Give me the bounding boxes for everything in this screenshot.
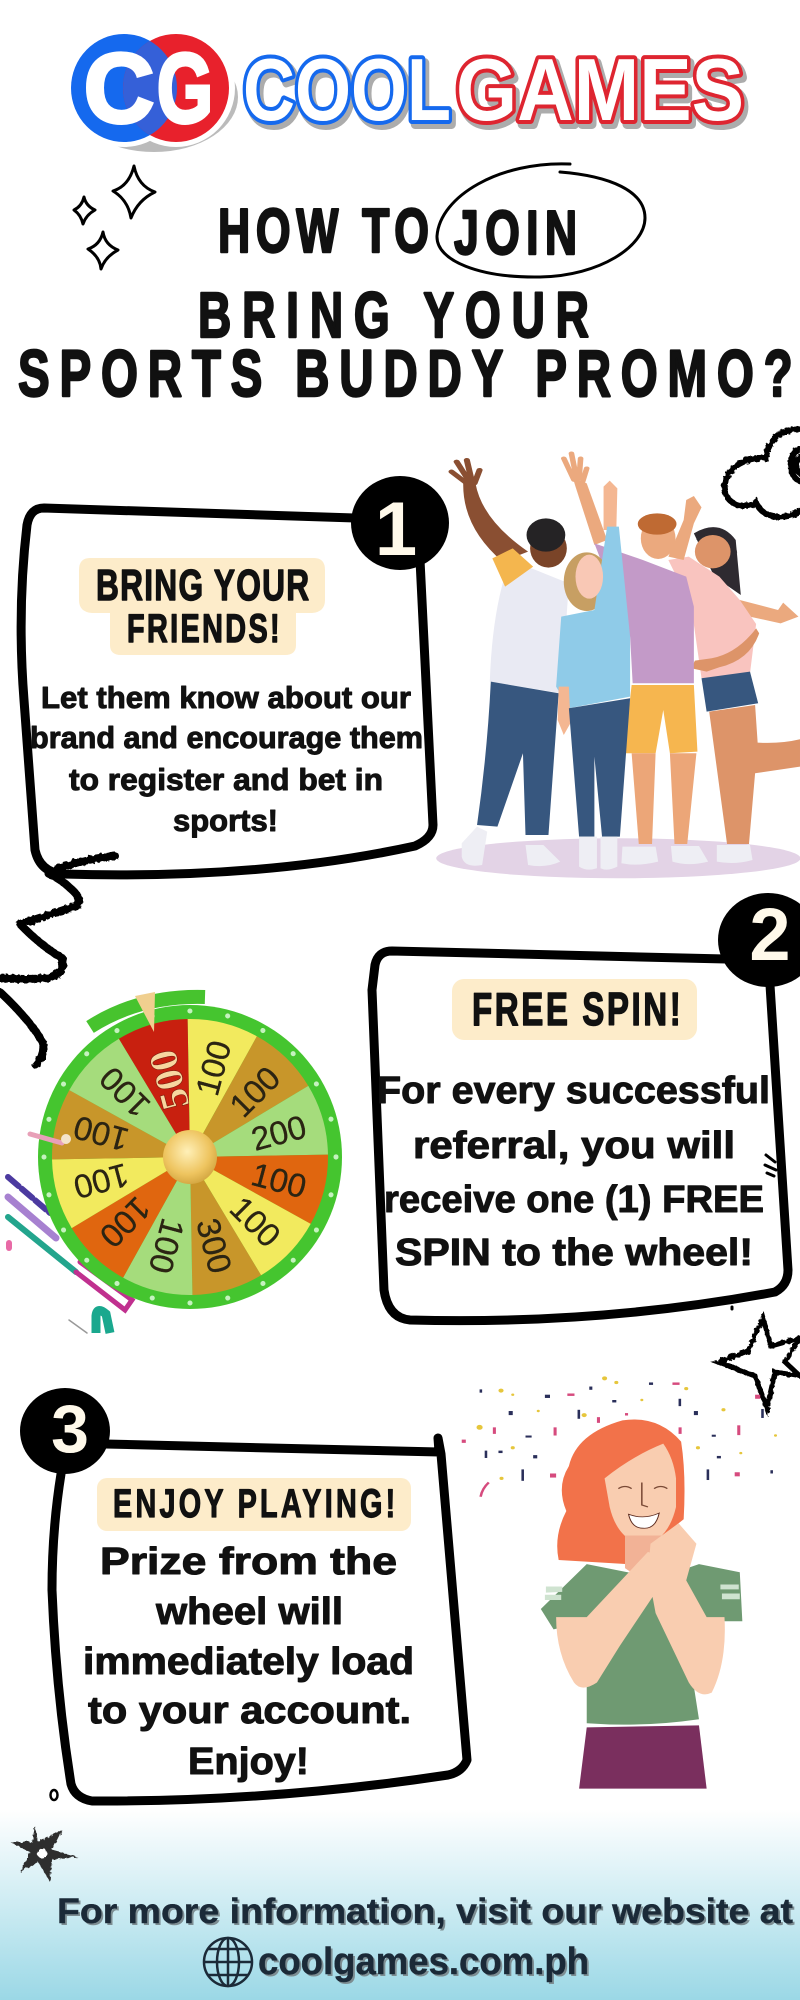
panel 3 frame (52, 1438, 467, 1801)
panel: step 3 (20, 1388, 467, 1801)
wheel rim (38, 1005, 342, 1309)
wheel decorative stripes (8, 1177, 132, 1333)
panel 3 number badge (20, 1388, 110, 1474)
ground shadow (436, 838, 800, 878)
doodle: star bottom left (10, 1826, 78, 1882)
panel 1 body text: brand and encourage them (30, 720, 423, 755)
friend: blonde woman (556, 481, 630, 870)
wheel values: 100 (248, 1155, 310, 1205)
panel 3 body text: wheel will (155, 1591, 343, 1633)
footer text: For more information, visit our website at (59, 1894, 795, 1933)
wheel values: 100 (70, 1156, 133, 1206)
logo wordmark: COOL: COOL (243, 40, 451, 139)
panel 2 number badge (718, 893, 800, 987)
wheel values: 200 (247, 1108, 310, 1158)
wheel values: 100 (188, 1037, 238, 1099)
icon: globe (204, 1938, 252, 1986)
hair (557, 1420, 685, 1564)
panel 1 number badge: 1 (375, 487, 417, 572)
wheel values: 100 (92, 1060, 157, 1125)
closed eyes (618, 1482, 667, 1507)
footer text: coolgames.com.ph (258, 1941, 589, 1983)
panel 2 body text: referral, you will (413, 1125, 735, 1167)
panel 2 body text: For every successful (377, 1070, 770, 1112)
panel 3 body text: to your account. (88, 1690, 411, 1732)
title: HOW TO (218, 197, 429, 266)
wheel peg (30, 1134, 71, 1144)
illustration: group of friends (436, 453, 800, 878)
panel 3 body text: Enjoy! (188, 1741, 309, 1783)
smile (629, 1513, 659, 1528)
logo badge: CG circles (65, 29, 238, 152)
doodle: small ring (50, 1790, 58, 1800)
shirt (541, 1564, 742, 1725)
logo wordmark: COOL: COOL (246, 44, 454, 143)
panel 3 heading: ENJOY PLAYING! (113, 1481, 395, 1526)
wheel sectors (33, 1000, 347, 1314)
title (18, 197, 793, 411)
footer background gradient (0, 1810, 800, 2000)
panel 2 body text: receive one (1) FREE (384, 1179, 764, 1221)
panel 3 body text: immediately load (83, 1641, 414, 1683)
logo wordmark: GAMES: GAMES (456, 40, 744, 139)
footer text: coolgames.com.ph (260, 1943, 591, 1985)
panel 1 body text: Let them know about our (41, 680, 411, 715)
pants (579, 1725, 707, 1789)
logo badge: CG circles: C (84, 33, 154, 143)
hand-drawn ellipse around JOIN (437, 164, 645, 277)
arms and hands (556, 1523, 725, 1694)
wheel values: 100 (70, 1109, 132, 1159)
panel 3 body text (83, 1541, 414, 1783)
sleeve stripes (545, 1585, 740, 1600)
logo badge: CG circles: G (157, 33, 213, 143)
wheel values: 100 (93, 1190, 158, 1255)
panel: step 2 (372, 893, 800, 1321)
doodle: star top right (718, 1318, 800, 1408)
neck (625, 1536, 663, 1580)
illustration: happy woman with confetti (462, 1376, 777, 1789)
panel 2 body text: SPIN to the wheel! (395, 1232, 753, 1274)
panel 1 frame (21, 508, 433, 875)
panel 1 heading: BRING YOUR (96, 561, 309, 610)
wheel pointer (135, 992, 155, 1032)
chart: prize wheel (8, 992, 347, 1333)
panel 2 heading: FREE SPIN! (472, 985, 681, 1035)
panel 3 body text: Prize from the (100, 1541, 397, 1583)
title: BRING YOUR (198, 280, 589, 351)
panel 1 number badge (351, 476, 449, 572)
footer text (57, 1892, 795, 1986)
friend: woman in pink top (668, 527, 800, 863)
wheel hub (163, 1130, 217, 1184)
title: SPORTS BUDDY PROMO? (18, 337, 793, 411)
panel 1 body text: to register and bet in (69, 762, 383, 797)
title: JOIN (454, 199, 577, 268)
panel 2 frame (372, 951, 788, 1321)
footer text: For more information, visit our website at (57, 1892, 793, 1931)
panel 3 number badge: 3 (51, 1391, 89, 1467)
wheel values (70, 1037, 310, 1277)
wheel values: 100 (222, 1059, 287, 1124)
friend: man in white shirt (452, 460, 569, 866)
doodle: cloud top right (725, 429, 800, 517)
logo wordmark: GAMES: GAMES (459, 44, 747, 143)
doodle: squiggle between panels (0, 856, 115, 1065)
wheel values: 100 (142, 1215, 192, 1277)
friend: man in purple shirt (564, 453, 708, 865)
doodle marks (732, 1155, 776, 1309)
face (605, 1444, 676, 1546)
panel 1 heading: FRIENDS! (127, 606, 280, 651)
panel 2 body text (377, 1070, 770, 1274)
panel 1 heading (79, 558, 325, 655)
panel 2 number badge: 2 (749, 893, 791, 976)
confetti (462, 1376, 777, 1497)
logo: Cool Games (65, 29, 747, 152)
icon: sparkle stars (74, 166, 155, 269)
wheel values: 500 (139, 1045, 198, 1115)
wheel values: 100 (223, 1189, 288, 1254)
panel 1 body text: sports! (173, 803, 278, 838)
wheel values: 300 (189, 1214, 239, 1277)
panel: step 1 (21, 476, 449, 875)
panel 1 body text (30, 680, 423, 838)
